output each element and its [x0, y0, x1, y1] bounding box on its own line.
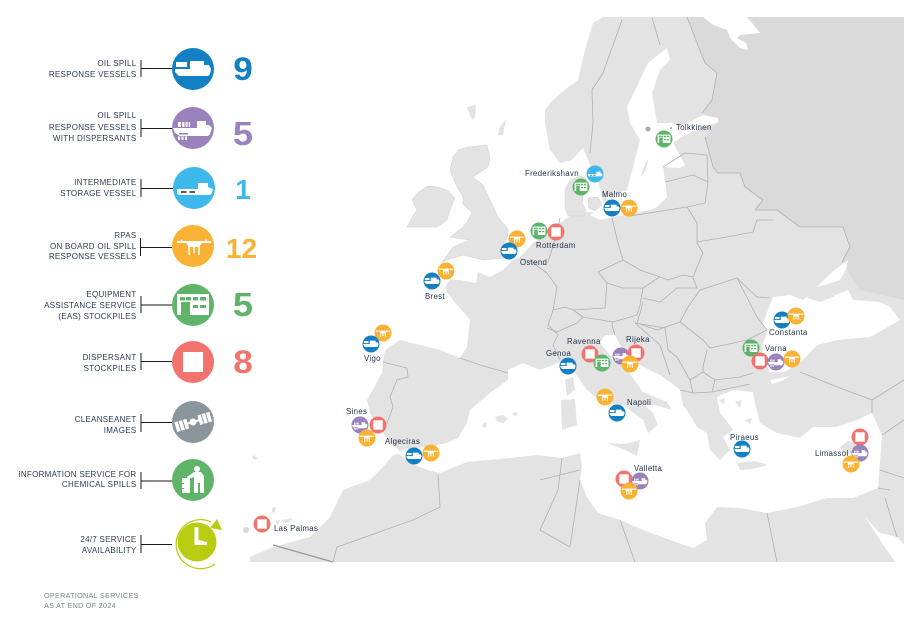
port: Malmo: Malmo	[602, 190, 627, 199]
port: Constanta	[769, 308, 808, 337]
port: Sines	[346, 407, 386, 446]
Atlantic and North Sea	[250, 17, 606, 557]
legend row: 24/7 service	[80, 519, 222, 569]
legend row: 24/7 service: AVAILABILITY	[82, 546, 137, 555]
Baltic Sea	[590, 48, 718, 220]
port: Genoa: Genoa	[546, 349, 571, 358]
legend row: EAS stockpiles: (EAS) STOCKPILES	[58, 312, 136, 321]
legend row: RPAS: RESPONSE VESSELS	[49, 252, 136, 261]
port: Ostend	[500, 230, 547, 267]
port: Rijeka	[612, 335, 650, 372]
legend row: intermediate storage vessel	[60, 167, 251, 209]
island: Canary	[243, 527, 249, 533]
footnote: OPERATIONAL SERVICES	[44, 591, 139, 600]
legend row: RPAS: 12	[226, 233, 257, 264]
Aland	[646, 126, 650, 132]
legend row: dispersant stockpiles: DISPERSANT	[83, 353, 136, 362]
legend row: dispersant stockpiles: STOCKPILES	[84, 364, 136, 373]
port: Malmo	[602, 190, 638, 216]
legend row: intermediate storage vessel: STORAGE VESSEL	[60, 189, 137, 198]
port: Frederikshavn: Frederikshavn	[525, 169, 579, 178]
Western Sahara border	[273, 545, 333, 562]
legend row: vessels with dispersants	[49, 107, 253, 153]
port: Ravenna	[567, 337, 610, 372]
port: Rotterdam: Rotterdam	[536, 241, 576, 250]
Black Sea	[762, 290, 900, 372]
legend row: vessels with dispersants: OIL SPILL	[97, 111, 137, 120]
legend row: intermediate storage vessel: 1	[235, 174, 251, 205]
Baltic islands	[641, 160, 648, 177]
footnote: AS AT END OF 2024	[44, 601, 116, 610]
islands	[252, 105, 862, 525]
port: Las Palmas: Las Palmas	[274, 524, 318, 533]
legend row: oil spill response vessels: 9	[233, 52, 253, 88]
port: Tolkkinen: Tolkkinen	[676, 123, 712, 132]
legend row: CleanSeaNet images	[75, 401, 214, 443]
Mediterranean Sea	[397, 335, 882, 548]
legend row: EAS stockpiles: ASSISTANCE SERVICE	[44, 301, 136, 310]
Crimea and Azov	[803, 284, 835, 302]
borders	[333, 17, 904, 562]
port: Genoa	[546, 349, 576, 374]
port: Frederikshavn	[525, 166, 604, 196]
port: Ravenna: Ravenna	[567, 337, 601, 346]
port: Las Palmas	[254, 516, 318, 533]
port: Piraeus	[730, 433, 759, 458]
legend row: EAS stockpiles	[44, 284, 253, 326]
port: Algeciras: Algeciras	[385, 437, 420, 446]
legend row: RPAS: RPAS	[114, 231, 136, 240]
legend row: vessels with dispersants: 5	[233, 116, 253, 153]
legend row: chemical spills information: CHEMICAL SPILLS	[62, 480, 136, 489]
footnote	[44, 591, 139, 610]
legend row: RPAS: ON BOARD OIL SPILL	[50, 242, 137, 251]
Marmara and Red Sea	[770, 376, 904, 562]
legend row: intermediate storage vessel: INTERMEDIATE	[74, 178, 136, 187]
legend row: EAS stockpiles: 5	[233, 287, 253, 324]
port: Valletta: Valletta	[634, 464, 663, 473]
legend row: 24/7 service: 24/7 SERVICE	[80, 535, 136, 544]
legend row: CleanSeaNet images: CLEANSEANET	[75, 415, 136, 424]
legend row: vessels with dispersants: RESPONSE VESSELS	[49, 123, 136, 132]
port: Napoli: Napoli	[627, 398, 651, 407]
icon: person with drum	[182, 466, 204, 493]
port: Limassol: Limassol	[815, 449, 849, 458]
legend row: vessels with dispersants: WITH DISPERSANTS	[53, 134, 136, 143]
port: Sines: Sines	[346, 407, 367, 416]
icon: satellite	[174, 412, 212, 432]
port: Ostend: Ostend	[520, 258, 547, 267]
land base	[250, 17, 904, 562]
map of Europe	[243, 17, 904, 562]
port: Limassol	[815, 428, 868, 472]
legend row: dispersant stockpiles: 8	[233, 345, 253, 381]
port: Rijeka: Rijeka	[626, 335, 650, 344]
legend row: oil spill response vessels	[49, 48, 253, 90]
legend row: RPAS	[49, 225, 257, 267]
White Sea	[703, 17, 760, 50]
legend row: chemical spills information: INFORMATION SERVICE FOR	[18, 470, 136, 479]
port: Constanta: Constanta	[769, 328, 808, 337]
port: Brest: Brest	[425, 292, 445, 301]
port: Vigo: Vigo	[364, 354, 381, 363]
port: Rotterdam	[530, 222, 576, 250]
port: Varna	[742, 340, 800, 370]
legend row: EAS stockpiles: EQUIPMENT	[86, 290, 136, 299]
port: Napoli	[596, 388, 651, 422]
legend row: oil spill response vessels: OIL SPILL	[97, 59, 137, 68]
port: Vigo	[362, 324, 392, 363]
Ireland	[407, 186, 455, 227]
port: Tolkkinen	[656, 123, 712, 148]
port: Varna: Varna	[765, 344, 787, 353]
port: Valletta	[616, 464, 663, 500]
legend row: CleanSeaNet images: IMAGES	[104, 426, 136, 435]
port: Algeciras	[385, 437, 440, 464]
port: Piraeus: Piraeus	[730, 433, 759, 442]
port: Brest	[424, 262, 454, 301]
Great Britain	[442, 145, 508, 262]
Russia darker land	[687, 17, 904, 300]
legend row: chemical spills information	[18, 459, 214, 501]
legend row: dispersant stockpiles	[83, 341, 253, 383]
Denmark	[565, 176, 602, 216]
legend row: oil spill response vessels: RESPONSE VESSELS	[49, 70, 136, 79]
